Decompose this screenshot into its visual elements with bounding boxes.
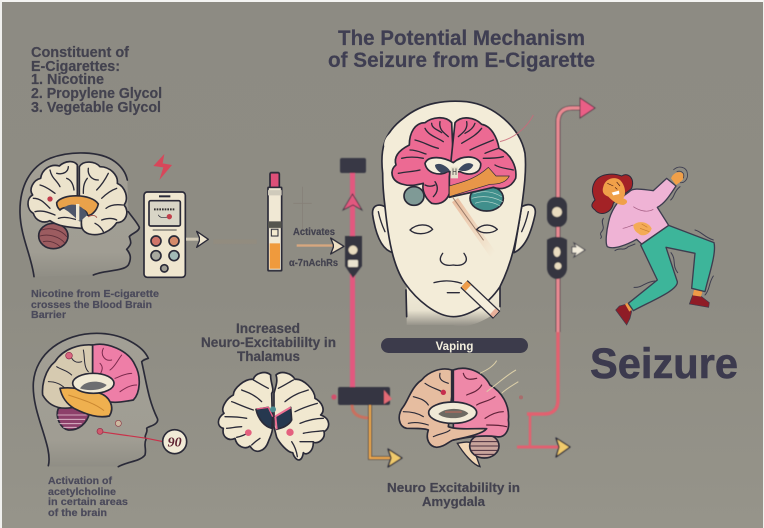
dark junction bar [331, 387, 392, 405]
tremor marks [600, 187, 713, 295]
ankles [625, 290, 703, 312]
pink pointer [500, 115, 533, 142]
text block: nicotine crosses blood brain barrier [31, 288, 159, 321]
pathway: left vertical pink line [331, 158, 402, 467]
text block: nicotine crosses blood brain barrier: Barrier [31, 309, 66, 321]
top dark box [340, 158, 366, 173]
brain [42, 344, 139, 430]
pathway: right vertical line to seizure [517, 98, 595, 457]
figure: person having a seizure [592, 167, 715, 325]
panel: vape pen and activation [213, 173, 344, 271]
thalamus ring [57, 196, 98, 215]
panel: amygdala brain [399, 361, 523, 467]
pink top arrow [558, 98, 595, 332]
label bar: vaping [381, 338, 528, 353]
face [603, 178, 627, 205]
panel: thalamus brain [218, 373, 329, 460]
arrow: activates [297, 238, 344, 254]
nose [440, 253, 466, 265]
bracket arrow [517, 413, 570, 457]
panel: head with acetylcholine activation [33, 333, 187, 467]
dark thalamic wedges [256, 407, 273, 428]
heading: increased neuro-excitability in thalamus: Thalamus [237, 349, 300, 364]
hand on belly [633, 222, 652, 235]
text block: constituents of e-cigarettes: 3. Vegetable Glycol [31, 100, 161, 116]
panel: head with brain in profile [20, 153, 208, 277]
head outline [33, 333, 158, 467]
title: of Seizure from E-Cigarette [328, 49, 595, 72]
ears [373, 205, 393, 253]
small white arrow [572, 243, 585, 257]
orange branch arrow [352, 405, 402, 467]
icon: receptor badge: 90 [168, 436, 182, 451]
shoes [616, 304, 632, 325]
eyes [410, 225, 497, 234]
nerve rays [480, 361, 518, 393]
raised hand [671, 172, 684, 185]
text block: constituents of e-cigarettes [31, 45, 162, 116]
shirt [606, 178, 676, 248]
hair [592, 174, 633, 213]
label: alpha-7 nAChRs: α-7nAchRs [289, 258, 338, 269]
pink line [350, 172, 355, 388]
text block: constituents of e-cigarettes: Constituent of [31, 45, 129, 61]
text block: nicotine crosses blood brain barrier: Nicotine from E-cigarette [31, 288, 159, 300]
heading: neuro excitability in amygdala: Neuro Excitabililty in [387, 480, 520, 495]
brain stem ray [455, 200, 493, 255]
title [328, 27, 595, 72]
heading: neuro excitability in amygdala: Amygdala [422, 494, 486, 509]
head outline [20, 153, 139, 277]
text block: activation of acetylcholine: in certain areas [48, 496, 128, 508]
heading: increased neuro-excitability in thalamus [201, 321, 336, 364]
head [382, 101, 526, 317]
icon: receptor badge [163, 430, 187, 454]
text block: constituents of e-cigarettes: E-Cigarettes: [31, 59, 120, 75]
brain [28, 162, 127, 249]
heading: neuro excitability in amygdala [387, 480, 520, 509]
icon: vape pen [268, 173, 282, 271]
heading: seizure: Seizure [590, 340, 738, 388]
lower curve into bracket [527, 332, 558, 414]
brain [392, 118, 516, 211]
upward arrowhead [343, 194, 362, 210]
heading: increased neuro-excitability in thalamus: Neuro-Excitabililty in [201, 335, 336, 350]
faint incoming arrow trail [213, 239, 257, 244]
text block: activation of acetylcholine [48, 475, 128, 519]
icon: red lightning bolt [153, 154, 172, 180]
faint crosshair [293, 187, 312, 230]
label: activates: Activates [293, 227, 335, 238]
trousers [628, 225, 715, 311]
red connector line [100, 432, 163, 442]
neck [407, 287, 500, 326]
title: The Potential Mechanism [338, 27, 585, 50]
panel: central face with brain and cigarette [373, 101, 535, 326]
heading: increased neuro-excitability in thalamus: Increased [236, 321, 300, 336]
arrow [186, 231, 208, 247]
text block: activation of acetylcholine: acetylcholine [48, 486, 116, 498]
icon: e-cigarette device [144, 192, 185, 277]
upper node [547, 197, 567, 227]
label bar: vaping: Vaping [436, 341, 473, 353]
text block: activation of acetylcholine: of the brain [48, 507, 107, 519]
mouth [434, 281, 462, 293]
lower node [547, 237, 567, 279]
text block: constituents of e-cigarettes: 1. Nicotine [31, 72, 104, 88]
text block: nicotine crosses blood brain barrier: crosses the Blood Brain [31, 299, 152, 311]
text block: activation of acetylcholine: Activation of [48, 475, 112, 487]
text block: constituents of e-cigarettes: 2. Propylene Glycol [31, 86, 162, 102]
switch node [345, 236, 362, 278]
icon: cigarette [464, 284, 497, 315]
